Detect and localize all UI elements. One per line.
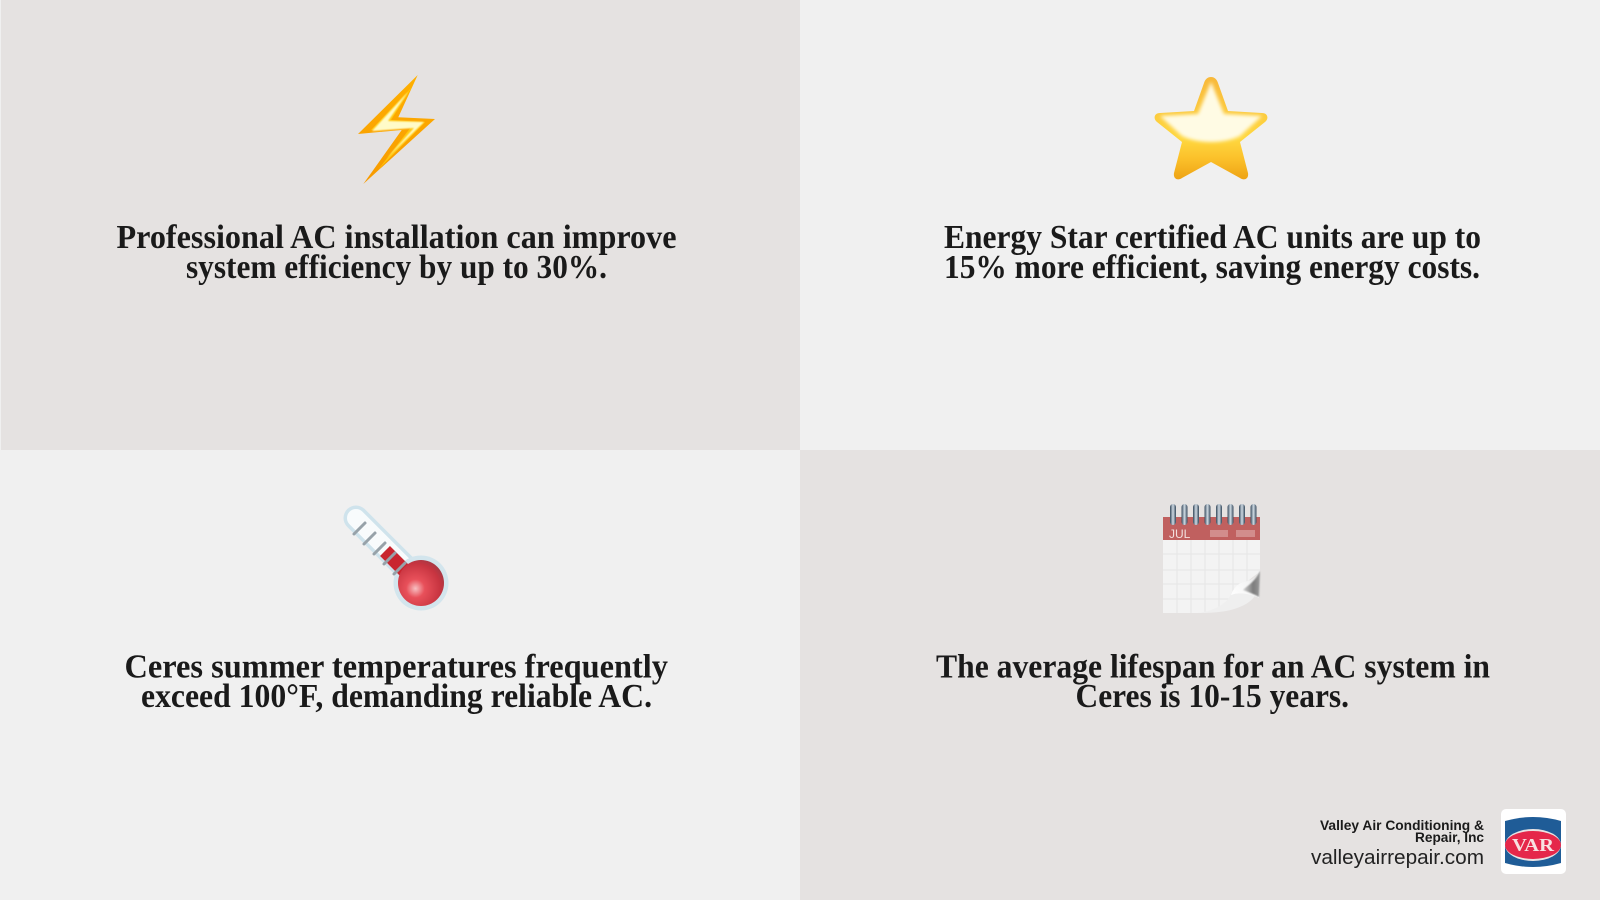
logo	[1501, 809, 1566, 874]
text: temperature fact	[124, 648, 668, 715]
text: temperature fact: exceed 100°F, demanding reliable AC.	[141, 678, 652, 715]
text: efficiency fact: system efficiency by up to 30%.	[186, 249, 607, 286]
icon: thermometer	[354, 518, 448, 610]
text: efficiency fact	[116, 219, 676, 286]
brand name: Repair, Inc	[1415, 830, 1484, 845]
brand name: Valley Air Conditioning &	[1320, 818, 1484, 833]
icon: star	[1155, 77, 1267, 179]
panel: efficiency	[0, 0, 800, 450]
text: energy star fact: 15% more efficient, saving energy costs.	[944, 249, 1480, 286]
text: efficiency fact: Professional AC installation can improve	[116, 219, 676, 256]
logo: VAR	[1512, 835, 1555, 855]
panel: summer temperatures	[0, 450, 800, 900]
icon: lightning bolt	[358, 75, 435, 184]
calendar month label: JUL	[1169, 527, 1191, 541]
brand name	[1320, 818, 1484, 845]
text: lifespan fact: The average lifespan for an AC system in	[936, 648, 1490, 686]
footer brand	[1311, 809, 1566, 874]
icon: calendar	[1163, 504, 1260, 613]
text: lifespan fact	[936, 648, 1490, 715]
text: energy star fact	[944, 219, 1481, 286]
panel: lifespan	[800, 450, 1600, 900]
text: lifespan fact: Ceres is 10-15 years.	[1076, 678, 1349, 715]
text: energy star fact: Energy Star certified AC units are up to	[944, 219, 1481, 256]
website: valleyairrepair.com	[1311, 847, 1484, 869]
panel: energy star	[800, 0, 1600, 450]
text: temperature fact: Ceres summer temperatures frequently	[124, 648, 668, 686]
